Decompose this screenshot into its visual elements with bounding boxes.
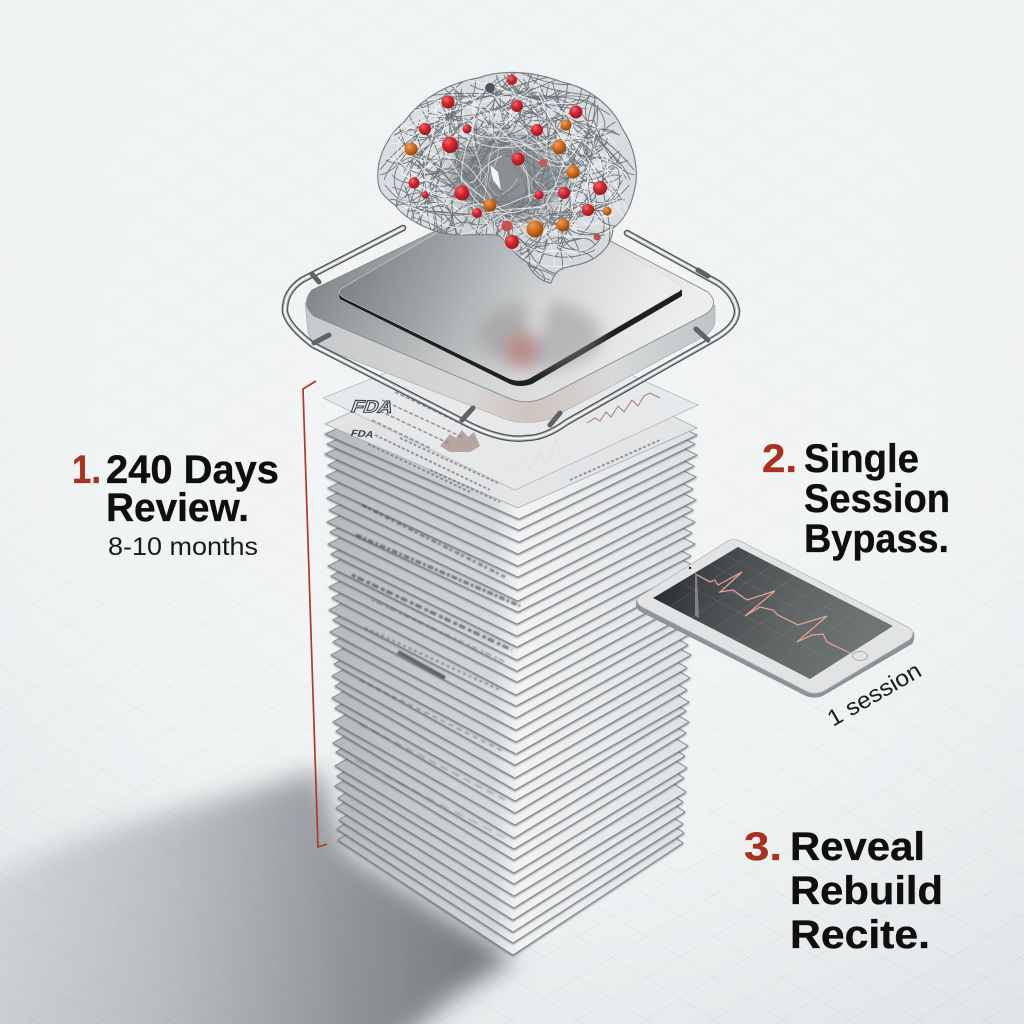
platform base plate: [306, 196, 714, 402]
second document sheet: [325, 338, 697, 508]
chrome rail: [285, 228, 737, 439]
brain volume: [378, 72, 636, 283]
cast shadow of paper stack: [0, 770, 515, 1024]
screen grid: [669, 554, 880, 662]
callout 3: Reveal: [790, 825, 925, 869]
label: FDA logo: FDA: [348, 398, 396, 417]
callout 3: Recite.: [790, 913, 930, 957]
tablet screen: [653, 547, 893, 679]
chart: area chart: [440, 430, 480, 452]
chart: second sheet trace: [500, 440, 572, 472]
top plate: [339, 193, 681, 380]
timeline bracket: [303, 381, 327, 847]
callout 2: Session: [804, 477, 950, 521]
brain: [377, 72, 637, 284]
home button: [852, 652, 868, 660]
callout 1: 240 Days: [106, 448, 279, 492]
label: FDA on second sheet: FDA: [349, 429, 376, 441]
callout 3: Rebuild: [790, 869, 943, 913]
tablet: [636, 540, 914, 698]
camera: [689, 567, 691, 569]
callout 2: 2.: [762, 437, 797, 481]
callout 1: 8-10 months: [108, 533, 258, 561]
callout 3: 3.: [744, 825, 782, 869]
callout 2: [762, 437, 950, 561]
platform skirt: [305, 303, 715, 422]
chart: line chart: [587, 393, 660, 423]
top document sheet: [323, 322, 698, 490]
paper stack: [325, 350, 697, 955]
neural fibres: [380, 72, 634, 281]
tablet body edge: [636, 600, 914, 698]
callout 1: [72, 448, 279, 561]
text rows: second sheet: [368, 435, 660, 502]
printed text rows on stacked sheets: [352, 505, 520, 838]
text rows: top sheet: [372, 392, 470, 448]
callout 2: Single: [804, 437, 919, 481]
callout 3: [744, 825, 943, 957]
top plate edge: [339, 290, 682, 386]
callout 1: 1.: [72, 448, 101, 492]
callout 2: Bypass.: [804, 517, 949, 561]
brain reflection on plate: [478, 298, 602, 369]
screen glare: [695, 572, 699, 618]
callout 1: Review.: [106, 486, 249, 530]
rail connectors: [312, 270, 708, 425]
tablet body: [637, 540, 913, 693]
neural nodes: [404, 75, 612, 249]
heartbeat trace: [697, 572, 850, 653]
metal platform: [305, 193, 715, 422]
label: 1 session: 1 session: [822, 657, 926, 731]
